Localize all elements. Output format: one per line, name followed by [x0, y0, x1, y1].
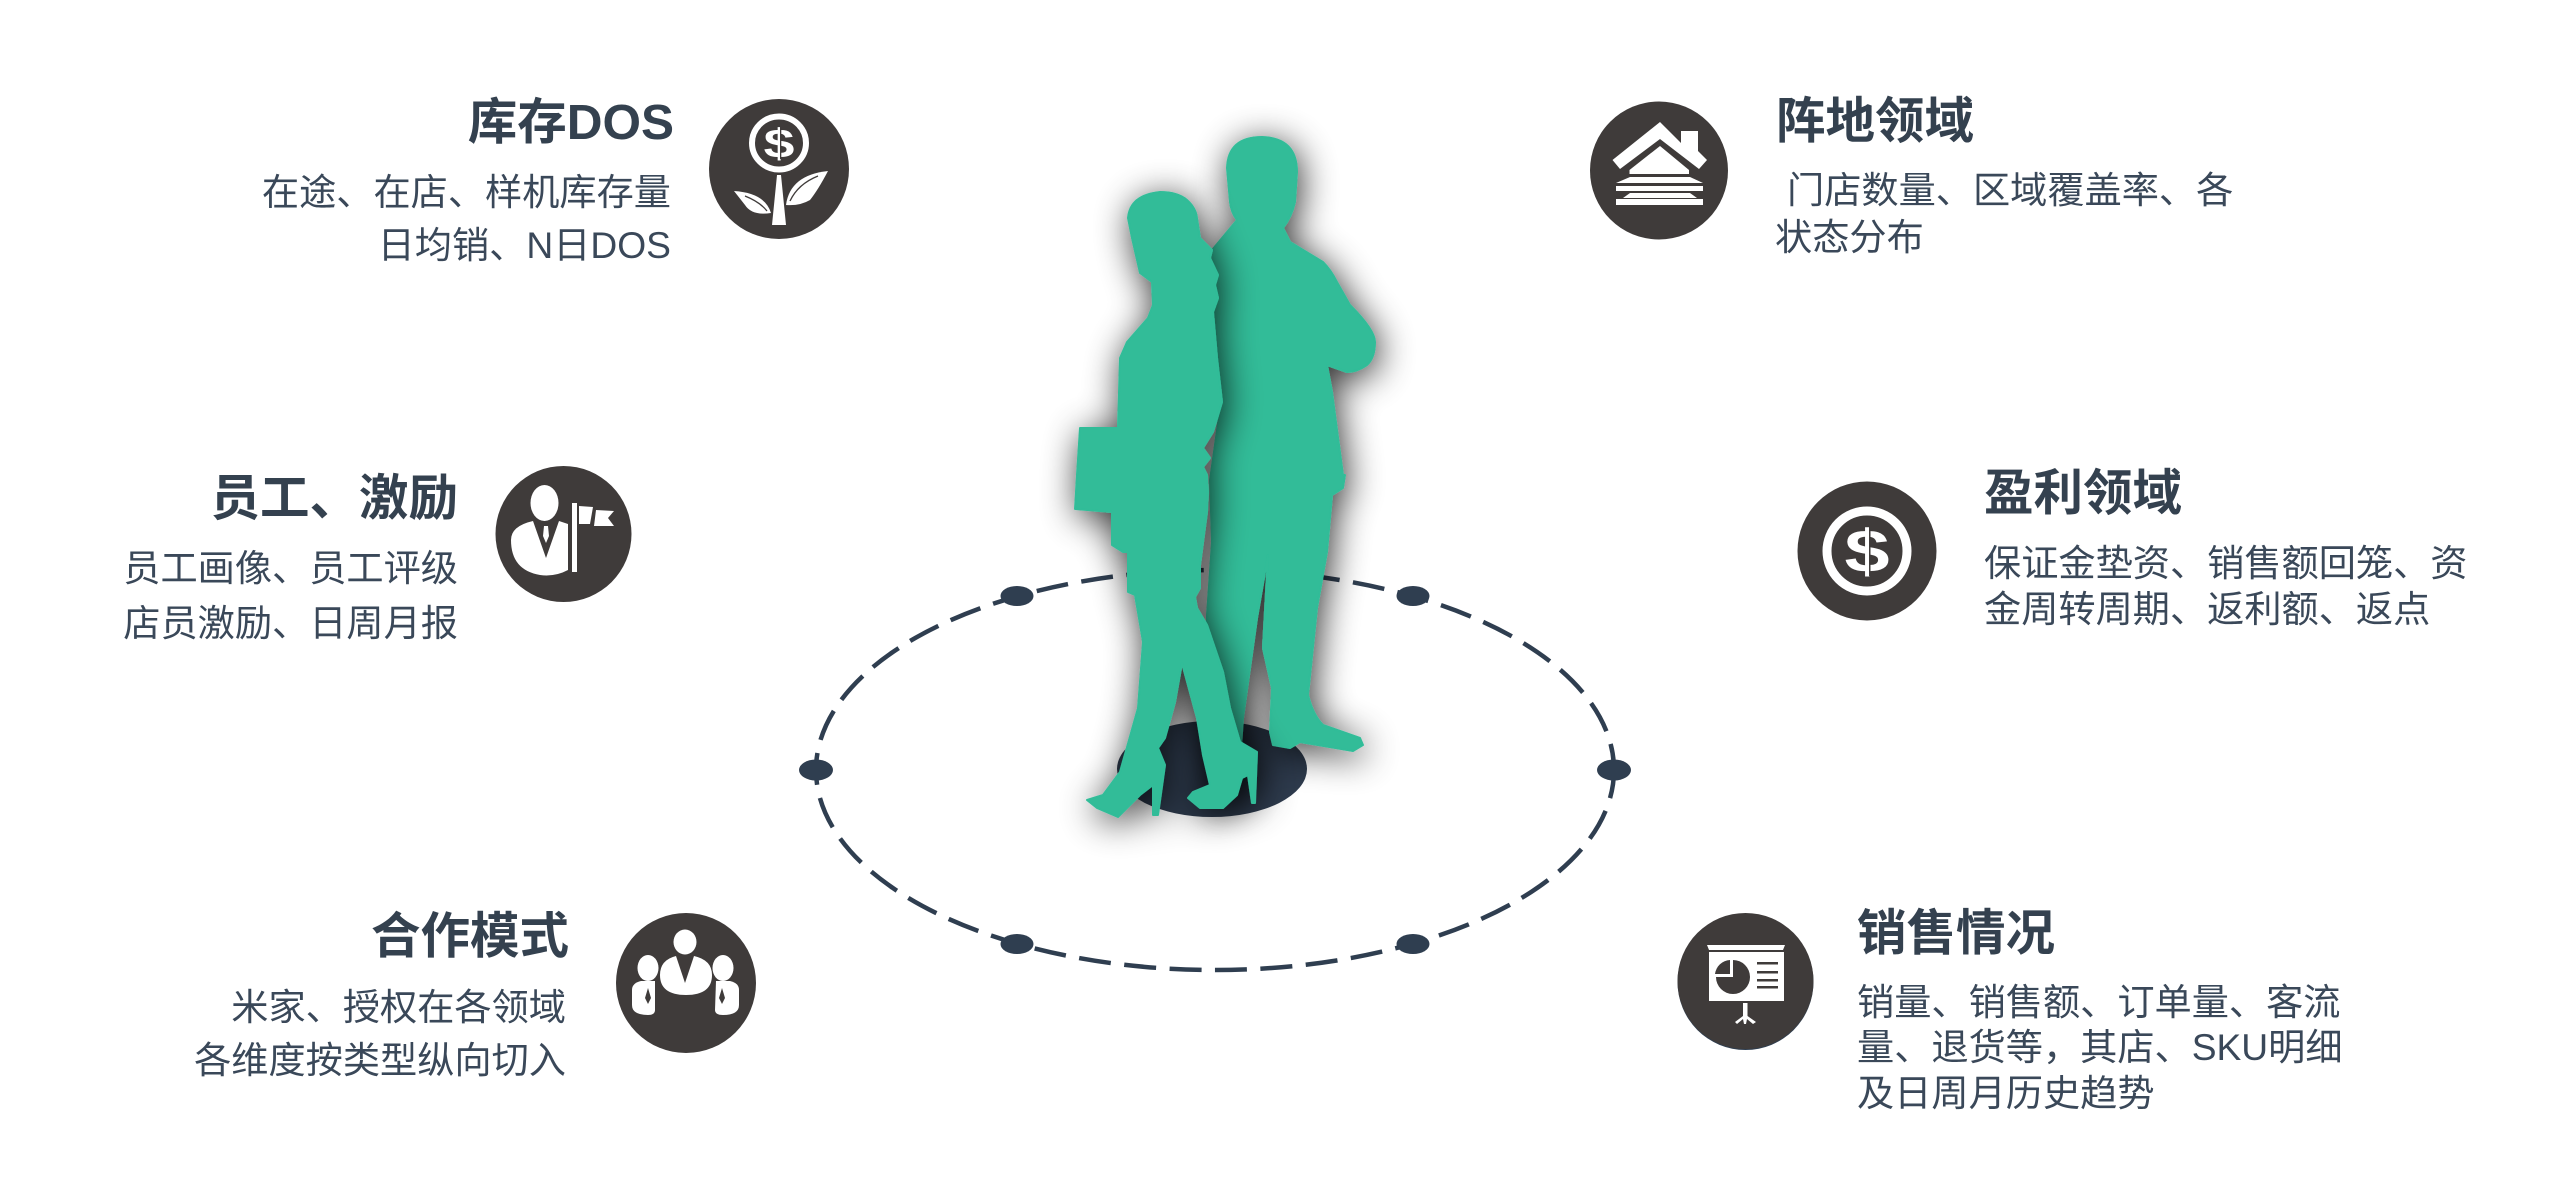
text: profit details: 金周转周期、返利额、返点	[1984, 588, 2430, 630]
icon: presentation board	[1678, 913, 1814, 1050]
text: inventory details: 在途、在店、样机库存量	[262, 171, 671, 213]
panel: cooperation model	[194, 909, 756, 1081]
panel: sales	[1678, 906, 2343, 1114]
heading: staff: 员工、激励	[210, 471, 458, 526]
panel: inventory DOS	[262, 95, 849, 266]
figure: woman silhouette with folder	[1075, 192, 1257, 817]
icon: money plant	[709, 99, 849, 239]
text: cooperation details: 米家、授权在各领域	[231, 986, 566, 1028]
floor disc under figures	[1117, 721, 1307, 817]
icon: money plant: $	[764, 121, 794, 167]
text: territory details	[1775, 169, 2233, 258]
panel: profit	[1798, 466, 2467, 630]
text: sales details	[1857, 981, 2343, 1114]
heading: inventory: 库存DOS	[468, 95, 674, 150]
text: profit details	[1984, 542, 2467, 630]
text: cooperation details	[194, 986, 566, 1081]
text: territory details: 状态分布	[1775, 216, 1924, 258]
text: territory details: 门店数量、区域覆盖率、各	[1787, 169, 2233, 211]
figure: man silhouette	[1205, 137, 1375, 800]
heading: sales: 销售情况	[1857, 906, 2055, 961]
text: sales details: 销量、销售额、订单量、客流	[1857, 981, 2340, 1023]
text: profit details: 保证金垫资、销售额回笼、资	[1984, 542, 2467, 584]
heading: profit: 盈利领域	[1984, 466, 2182, 521]
text: sales details: 及日周月历史趋势	[1857, 1072, 2155, 1114]
icon: group of three people	[616, 913, 756, 1053]
text: inventory details: 日均销、N日DOS	[378, 224, 671, 266]
heading: territory: 阵地领域	[1776, 94, 1974, 149]
text: staff details	[123, 547, 458, 644]
heading: cooperation: 合作模式	[371, 909, 569, 964]
icon: house	[1590, 102, 1728, 240]
icon: person with flag	[496, 466, 632, 602]
panel: territory	[1590, 94, 2233, 258]
orbit: dashed ellipse with six nodes	[799, 570, 1631, 970]
text: inventory details	[262, 171, 671, 266]
text: staff details: 员工画像、员工评级	[123, 547, 458, 589]
icon: dollar coin: $	[1844, 518, 1890, 585]
text: cooperation details: 各维度按类型纵向切入	[194, 1039, 566, 1081]
icon: dollar coin	[1798, 482, 1936, 620]
panel: staff and incentives	[123, 466, 632, 644]
text: sales details: 量、退货等，其店、SKU明细	[1857, 1026, 2343, 1068]
text: staff details: 店员激励、日周月报	[123, 602, 458, 644]
